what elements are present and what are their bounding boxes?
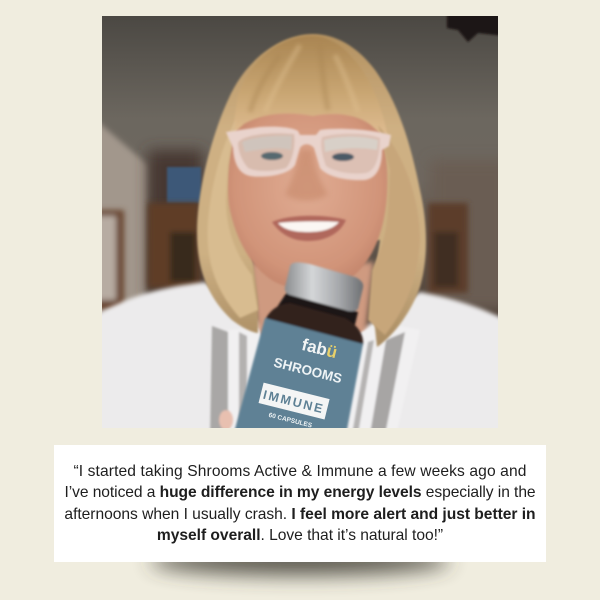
nose [285, 150, 328, 201]
left eye [261, 152, 283, 160]
neck [252, 258, 376, 336]
bottle cap [285, 262, 363, 311]
blue box on shelf [167, 167, 201, 203]
left lens reflection [242, 136, 292, 152]
left face hair strands [207, 120, 258, 318]
drop shadow beneath quote card [140, 562, 460, 592]
hair back [197, 34, 426, 347]
quote line 1: “I started taking Shrooms Active & Immune a few weeks ago and [73, 463, 527, 480]
quote line 3: afternoons when I usually crash. I feel more alert and just better in [64, 506, 536, 523]
left wooden furniture [148, 203, 200, 288]
quote card [54, 445, 546, 562]
product name: SHROOMS [272, 355, 344, 386]
right lens [321, 134, 380, 174]
brand logo text: fabü [300, 335, 339, 362]
glasses [226, 127, 391, 180]
mouth [272, 216, 346, 241]
bottle label [232, 318, 363, 440]
face [228, 102, 387, 290]
fringe [232, 36, 388, 140]
right eye [332, 153, 354, 161]
room background [102, 16, 498, 330]
right face hair strands [368, 125, 420, 335]
ceiling fixture [446, 16, 498, 42]
fringe strands [250, 45, 358, 112]
bottle label text [258, 338, 342, 428]
blouse [102, 279, 498, 428]
quote line 4: myself overall. Love that it’s natural too!” [157, 527, 443, 544]
photo: woman holding supplement bottle [102, 16, 498, 428]
picture frame on wall [102, 206, 128, 312]
blouse placket and grey strips [209, 326, 406, 428]
left lens [238, 133, 295, 171]
right wooden furniture [428, 203, 468, 293]
fingertip [219, 410, 233, 430]
immune badge: IMMUNE [262, 388, 326, 416]
right lens reflection [324, 137, 378, 152]
quote line 2: I’ve noticed a huge difference in my energy levels especially in the [64, 484, 536, 501]
bottle [232, 262, 363, 440]
